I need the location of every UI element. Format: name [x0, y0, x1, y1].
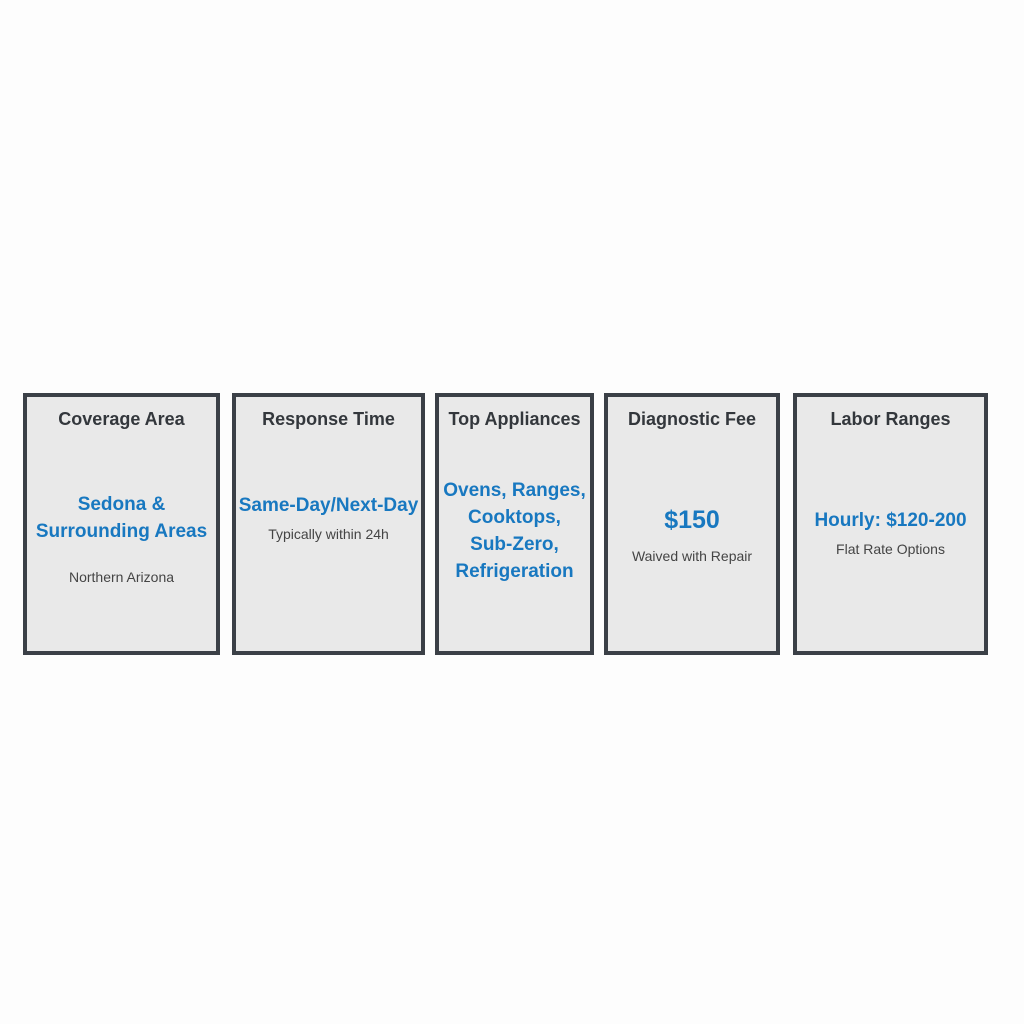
heading: Response Time: [262, 409, 395, 429]
subtext: Waived with Repair: [632, 548, 752, 564]
heading: Labor Ranges: [830, 409, 951, 429]
value: Surrounding Areas: [36, 521, 207, 542]
value: [36, 494, 207, 542]
value: $150: [664, 506, 720, 534]
heading: Coverage Area: [58, 409, 185, 429]
heading: Top Appliances: [448, 409, 580, 429]
value: Refrigeration: [455, 561, 574, 582]
value: Sub-Zero,: [470, 534, 559, 555]
value: Same-Day/Next-Day: [239, 495, 418, 516]
value: Sedona &: [78, 494, 165, 515]
value: Cooktops,: [468, 507, 561, 528]
value: [443, 480, 586, 582]
subtext: Flat Rate Options: [836, 541, 945, 557]
card: coverage area: [23, 393, 220, 655]
card: diagnostic fee: [604, 393, 780, 655]
card: labor ranges: [793, 393, 988, 655]
value: Hourly: $120-200: [814, 510, 967, 531]
value: Ovens, Ranges,: [443, 480, 586, 501]
subtext: Typically within 24h: [268, 526, 389, 542]
heading: Diagnostic Fee: [628, 409, 756, 429]
subtext: Northern Arizona: [69, 569, 174, 585]
card: top appliances: [435, 393, 594, 655]
card: response time: [232, 393, 425, 655]
